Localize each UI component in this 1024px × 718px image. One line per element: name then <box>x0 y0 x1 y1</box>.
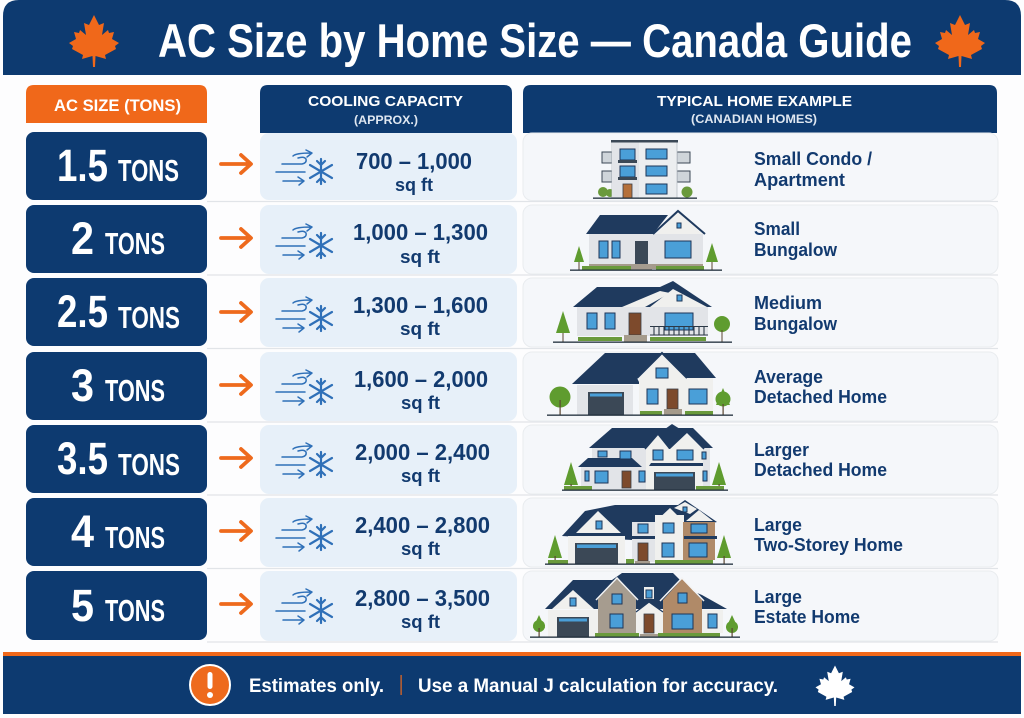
tons badge <box>26 205 207 273</box>
home cell: average detached <box>523 352 998 421</box>
home cell: medium bungalow <box>523 278 998 347</box>
row: 4 tons <box>26 498 998 567</box>
home cell: small bungalow <box>523 205 998 274</box>
icon: large two-storey home <box>545 500 733 565</box>
capacity cell: 2,400 – 2,800 <box>355 512 490 538</box>
header banner <box>3 0 1021 75</box>
capacity cell <box>260 278 517 347</box>
tons badge: TONS <box>118 153 179 188</box>
home cell: small bungalow: Bungalow <box>754 240 838 260</box>
icon: condo building <box>593 140 697 199</box>
footer note <box>249 675 778 697</box>
home cell: large estate: Large <box>754 587 802 607</box>
tons badge: TONS <box>105 520 165 555</box>
home cell: large two-storey: Two-Storey Home <box>754 535 903 555</box>
column header: typical home example <box>523 85 997 133</box>
row: 2.5 tons <box>26 278 998 347</box>
icon: warning <box>190 665 230 705</box>
capacity cell <box>260 205 517 274</box>
icon: right maple leaf <box>935 15 985 67</box>
column header: typical home example: TYPICAL HOME EXAMPLE <box>657 93 852 110</box>
tons badge <box>26 498 207 566</box>
row: 2 tons <box>26 205 998 274</box>
tons badge: TONS <box>118 300 180 335</box>
icon: average detached home <box>547 352 733 416</box>
tons badge <box>26 571 207 640</box>
tons badge: 2.5 <box>57 286 108 337</box>
column header: AC size: AC SIZE (TONS) <box>54 96 181 115</box>
home cell: large two-storey: Large <box>754 515 802 535</box>
home cell: average detached: Average <box>754 367 823 387</box>
capacity cell: sq ft <box>400 319 440 339</box>
icon: left maple leaf <box>69 15 119 67</box>
capacity cell: 1,600 – 2,000 <box>354 366 488 392</box>
capacity cell <box>260 498 517 567</box>
capacity cell: 700 – 1,000 <box>356 148 472 174</box>
capacity cell <box>260 571 517 641</box>
tons badge: TONS <box>105 593 165 628</box>
column header: cooling capacity <box>260 85 512 133</box>
row: 3.5 tons <box>26 424 998 494</box>
capacity cell: 2,800 – 3,500 <box>355 585 490 611</box>
icon: small bungalow <box>570 211 722 271</box>
capacity cell: 1,300 – 1,600 <box>353 292 488 318</box>
capacity cell: sq ft <box>400 247 440 267</box>
arrow <box>221 522 251 540</box>
capacity cell: sq ft <box>395 175 433 195</box>
arrow <box>221 155 251 173</box>
arrow <box>221 229 251 247</box>
tons badge: 1.5 <box>57 140 108 191</box>
capacity cell: 2,000 – 2,400 <box>355 439 490 465</box>
tons badge: 2 <box>71 213 94 264</box>
tons badge: 4 <box>71 506 94 557</box>
home cell: large estate <box>523 571 998 641</box>
home cell: medium bungalow: Bungalow <box>754 314 838 334</box>
home cell: small condo: Apartment <box>754 170 845 190</box>
icon: wind and snowflake <box>276 297 332 332</box>
title: AC Size by Home Size — Canada Guide <box>158 14 912 67</box>
home cell: larger detached: Larger <box>754 440 809 460</box>
capacity cell <box>260 352 517 421</box>
capacity cell <box>260 425 517 494</box>
icon: wind and snowflake <box>276 443 332 478</box>
column header: cooling capacity: COOLING CAPACITY <box>308 93 463 110</box>
icon: wind and snowflake <box>276 516 332 551</box>
arrow <box>221 376 251 394</box>
footer note: Estimates only. <box>249 676 384 697</box>
home cell: larger detached: Detached Home <box>754 460 887 480</box>
icon: wind and snowflake <box>276 370 332 405</box>
capacity cell: sq ft <box>401 612 440 632</box>
icon: larger detached home <box>562 424 728 491</box>
tons badge <box>26 425 207 493</box>
capacity cell: sq ft <box>401 539 440 559</box>
icon: medium bungalow <box>553 281 732 343</box>
footer banner <box>3 652 1021 714</box>
home cell: large estate: Estate Home <box>754 607 860 627</box>
capacity cell: sq ft <box>401 393 440 413</box>
tons badge <box>26 352 207 420</box>
column header: cooling capacity: (APPROX.) <box>354 113 418 127</box>
icon: large estate home <box>530 573 740 638</box>
row: 3 tons <box>26 352 998 421</box>
arrow <box>221 595 251 613</box>
capacity cell <box>260 133 517 200</box>
tons badge <box>26 132 207 200</box>
icon: white maple leaf <box>816 666 854 706</box>
row: 5 tons <box>26 571 998 641</box>
home cell: small condo: Small Condo / <box>754 149 872 169</box>
tons badge: 3 <box>71 360 94 411</box>
home cell: medium bungalow: Medium <box>754 293 822 313</box>
tons badge: TONS <box>118 447 180 482</box>
footer note: Use a Manual J calculation for accuracy. <box>418 676 778 697</box>
icon: wind and snowflake <box>276 224 332 259</box>
home cell: large two-storey <box>523 498 998 567</box>
home cell: average detached: Detached Home <box>754 387 887 407</box>
home cell: small bungalow: Small <box>754 219 800 239</box>
capacity cell: sq ft <box>401 466 440 486</box>
arrow <box>221 449 251 467</box>
tons badge: 3.5 <box>57 433 108 484</box>
icon: wind and snowflake <box>276 589 332 624</box>
tons badge <box>26 278 207 346</box>
column header: typical home example: (CANADIAN HOMES) <box>691 112 817 126</box>
capacity cell: 1,000 – 1,300 <box>353 219 488 245</box>
row: 1.5 tons <box>26 132 998 200</box>
home cell: larger detached <box>523 424 998 494</box>
column header: AC size <box>26 85 207 123</box>
tons badge: TONS <box>105 226 165 261</box>
tons badge: 5 <box>71 580 94 631</box>
arrow <box>221 303 251 321</box>
home cell: small condo <box>523 133 998 200</box>
icon: wind and snowflake <box>276 150 332 185</box>
tons badge: TONS <box>105 373 165 408</box>
